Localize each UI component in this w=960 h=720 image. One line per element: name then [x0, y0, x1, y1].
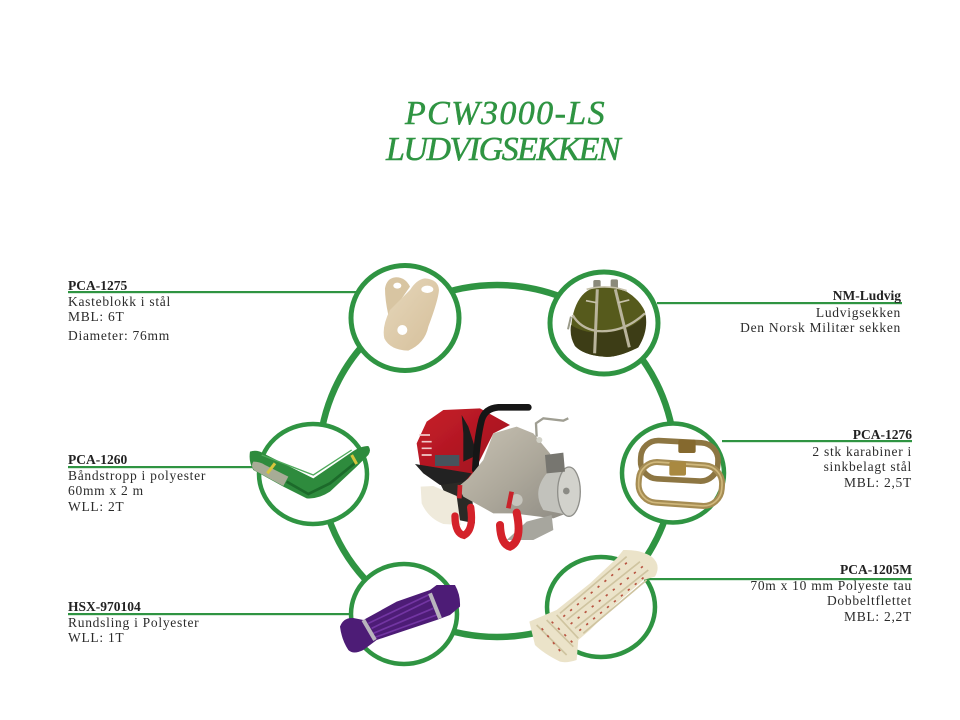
label: PCA-1276: PCA-1276 [853, 427, 912, 442]
label: NM-Ludvig: Ludvigsekken [816, 304, 901, 320]
engine label [435, 455, 459, 466]
label: HSX-970104: Rundsling i Polyester [68, 614, 199, 630]
title: PCW3000-LS [405, 95, 606, 132]
label: HSX-970104 [68, 599, 199, 645]
label: PCA-1275: Kasteblokk i stål [68, 294, 171, 308]
label: NM-Ludvig [740, 288, 901, 335]
icon: military backpack [568, 279, 646, 357]
label: PCA-1205M: PCA-1205M [840, 562, 912, 577]
winch body [458, 427, 567, 518]
label: PCA-1205M: MBL: 2,2T [844, 608, 912, 624]
circle: bottom right [547, 557, 655, 657]
label: PCA-1260: PCA-1260 [68, 452, 127, 467]
label: PCA-1276: sinkbelagt stål [824, 459, 912, 474]
fuel tank [421, 486, 461, 525]
label: NM-Ludvig: Den Norsk Militær sekken [740, 320, 901, 335]
handle [475, 407, 528, 470]
icon: green polyester sling [250, 446, 370, 498]
label: PCA-1260: 60mm x 2 m [68, 483, 144, 498]
label: PCA-1260: WLL: 2T [68, 498, 124, 514]
leader line: HSX-970104 [68, 613, 350, 615]
leader line: NM-Ludvig [657, 302, 902, 304]
label: PCA-1275: Diameter: 76mm [68, 328, 170, 342]
engine base [415, 464, 472, 485]
circle: top right [550, 272, 658, 374]
label: PCA-1205M [750, 562, 912, 624]
icon: rope coil [529, 550, 658, 662]
label: PCA-1205M: Dobbeltflettet [827, 593, 912, 608]
engine cover [417, 408, 510, 480]
label: HSX-970104: WLL: 1T [68, 630, 124, 645]
label: PCA-1275 [68, 278, 171, 342]
starter vents [419, 435, 432, 455]
circle: bottom left [351, 564, 457, 664]
icon: snatch block [384, 277, 439, 351]
circle: right [622, 424, 724, 522]
label: PCA-1276: 2 stk karabiner i [812, 444, 912, 458]
label: PCA-1205M: 70m x 10 mm Polyeste tau [750, 578, 912, 592]
leader line: PCA-1275 [68, 291, 358, 293]
icon: winch [415, 407, 580, 547]
leader line: PCA-1205M [645, 578, 912, 580]
label: PCA-1275: PCA-1275 [68, 278, 127, 293]
title: LUDVIGSEKKEN [386, 131, 619, 168]
label: PCA-1260: Båndstropp i polyester [68, 468, 206, 482]
base plate [507, 515, 553, 540]
engine underside [437, 477, 475, 523]
bolts [511, 494, 523, 506]
wire hook [536, 418, 568, 437]
leader line: PCA-1276 [722, 440, 912, 442]
lever [462, 415, 477, 462]
circle: left [259, 424, 367, 524]
icon: carabiners [637, 440, 723, 507]
title [385, 95, 622, 168]
label: PCA-1275: MBL: 6T [68, 309, 124, 324]
label: PCA-1276: MBL: 2,5T [844, 474, 912, 490]
label: PCA-1260 [68, 452, 206, 514]
label: HSX-970104: HSX-970104 [68, 599, 141, 614]
circle: top left [351, 266, 459, 370]
drum [538, 468, 568, 515]
label: PCA-1276 [812, 427, 912, 490]
icon: purple round sling [340, 585, 460, 652]
bracket [545, 453, 565, 473]
red hooks [455, 507, 471, 535]
label: NM-Ludvig: NM-Ludvig [833, 288, 901, 303]
central ring [319, 285, 675, 637]
leader line: PCA-1260 [68, 466, 263, 468]
